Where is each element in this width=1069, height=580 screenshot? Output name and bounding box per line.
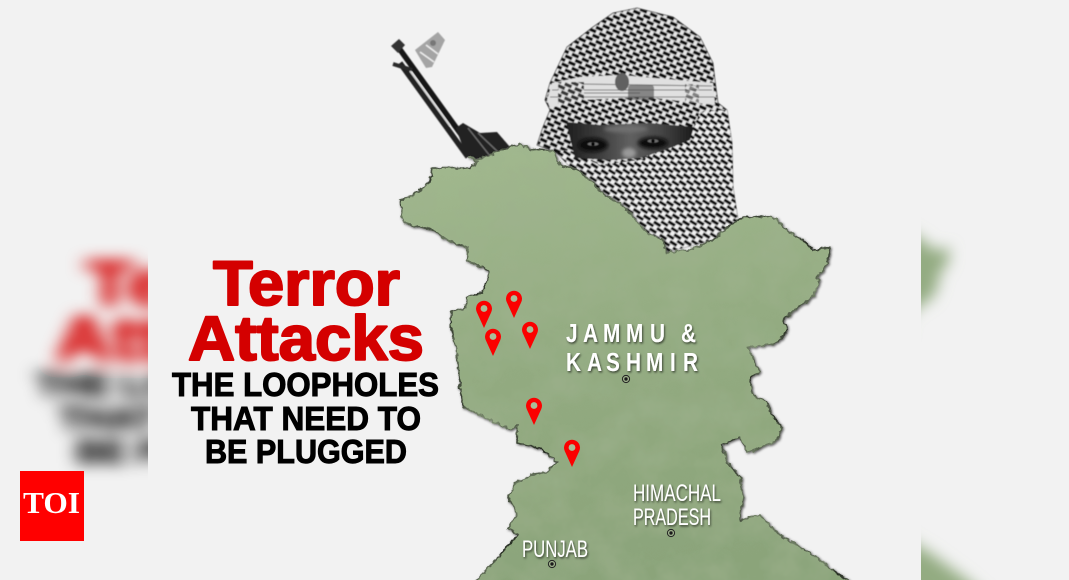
map label: Himachal Pradesh: PRADESH <box>633 504 711 531</box>
eyes <box>588 142 598 146</box>
map label: Himachal Pradesh: HIMACHAL <box>633 480 721 507</box>
subtitle <box>172 366 439 470</box>
map label: Jammu & Kashmir <box>566 319 698 377</box>
title: Terror Attacks: Terror <box>213 249 400 319</box>
blurred left side copy of title: Attacks <box>56 303 339 374</box>
map label: Himachal Pradesh <box>633 480 721 531</box>
blurred left side copy of title: THAT NEED TO <box>59 400 335 437</box>
icon: location pins <box>476 291 580 467</box>
blurred left side copy of title: BE PLUGGED <box>76 433 318 470</box>
title: Terror Attacks: Attacks <box>188 304 424 374</box>
figure: masked head with scarf <box>537 8 738 252</box>
map label: Jammu & Kashmir: KASHMIR <box>566 348 698 377</box>
map label: Jammu & Kashmir: JAMMU& <box>566 319 696 348</box>
icon: rifle <box>391 32 510 160</box>
map: Jammu & Kashmir <box>400 144 870 580</box>
blurred left side copy of title: Terror <box>86 248 310 319</box>
blurred left side copy of title <box>26 248 148 476</box>
lower scarf <box>557 110 738 252</box>
scarf wrap <box>537 8 738 252</box>
subtitle: THAT NEED TO <box>191 400 421 437</box>
eye shadows <box>578 126 668 158</box>
logo: TOI <box>20 471 84 541</box>
blurred left side copy of title: THE LOOPHOLES <box>36 366 357 403</box>
title: Terror Attacks <box>188 249 424 374</box>
headband <box>547 75 715 108</box>
blurred right side copy of map <box>921 227 982 580</box>
subtitle: THE LOOPHOLES <box>172 366 439 403</box>
logo: TOI: TOI <box>23 485 80 520</box>
subtitle: BE PLUGGED <box>205 433 407 470</box>
face <box>566 122 694 160</box>
map label: Punjab: PUNJAB <box>522 536 588 563</box>
map dots: capital markers <box>548 375 675 568</box>
